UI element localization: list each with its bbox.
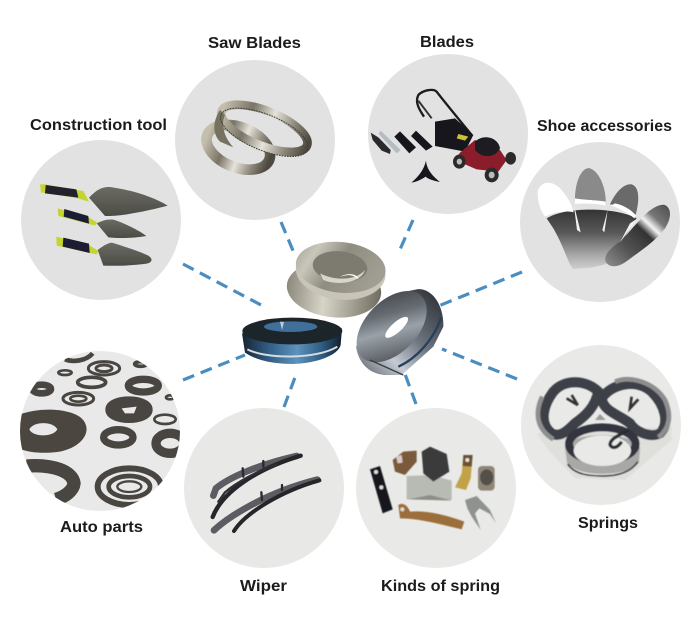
label: shoe accessories: Shoe accessories [537, 118, 672, 135]
panel: wiper [184, 408, 344, 595]
coil: blue [242, 318, 342, 364]
panel: springs [521, 345, 681, 532]
icon: lawn mower and blades [371, 90, 516, 183]
icon: stamped spring parts [370, 447, 496, 530]
label: saw blades: Saw Blades [208, 35, 301, 52]
circle: blades [368, 54, 528, 214]
circle: shoe accessories [520, 142, 680, 302]
icon: stamped washers [18, 353, 184, 505]
circle: springs [521, 345, 681, 505]
connector: dashed lines [183, 220, 522, 407]
centre: steel strip coils [242, 237, 443, 375]
panel: saw blades [175, 35, 335, 220]
circle: auto parts [20, 351, 180, 511]
label: springs: Springs [578, 515, 638, 532]
circle: kinds of spring [356, 408, 516, 568]
panel: construction tool [21, 117, 181, 300]
circle: saw blades [175, 60, 335, 220]
icon: three trowels [40, 184, 168, 266]
label: wiper: Wiper [240, 578, 287, 595]
coil: steel [343, 278, 443, 375]
icon: steel insoles [538, 168, 670, 269]
label: kinds of spring: Kinds of spring [381, 578, 500, 595]
panel: blades [368, 34, 528, 214]
circle: construction tool [21, 140, 181, 300]
coil: silver [284, 237, 388, 322]
panel: kinds of spring [356, 408, 516, 595]
label: blades: Blades [420, 34, 474, 51]
icon: saw blade rings [200, 95, 314, 178]
circle: wiper [184, 408, 344, 568]
label: auto parts: Auto parts [60, 519, 143, 536]
icon: wiper blades [213, 456, 319, 531]
label: construction tool: Construction tool [30, 117, 167, 134]
panel: shoe accessories [520, 118, 680, 302]
panel: auto parts [18, 351, 184, 536]
icon: coiled springs [537, 379, 672, 480]
